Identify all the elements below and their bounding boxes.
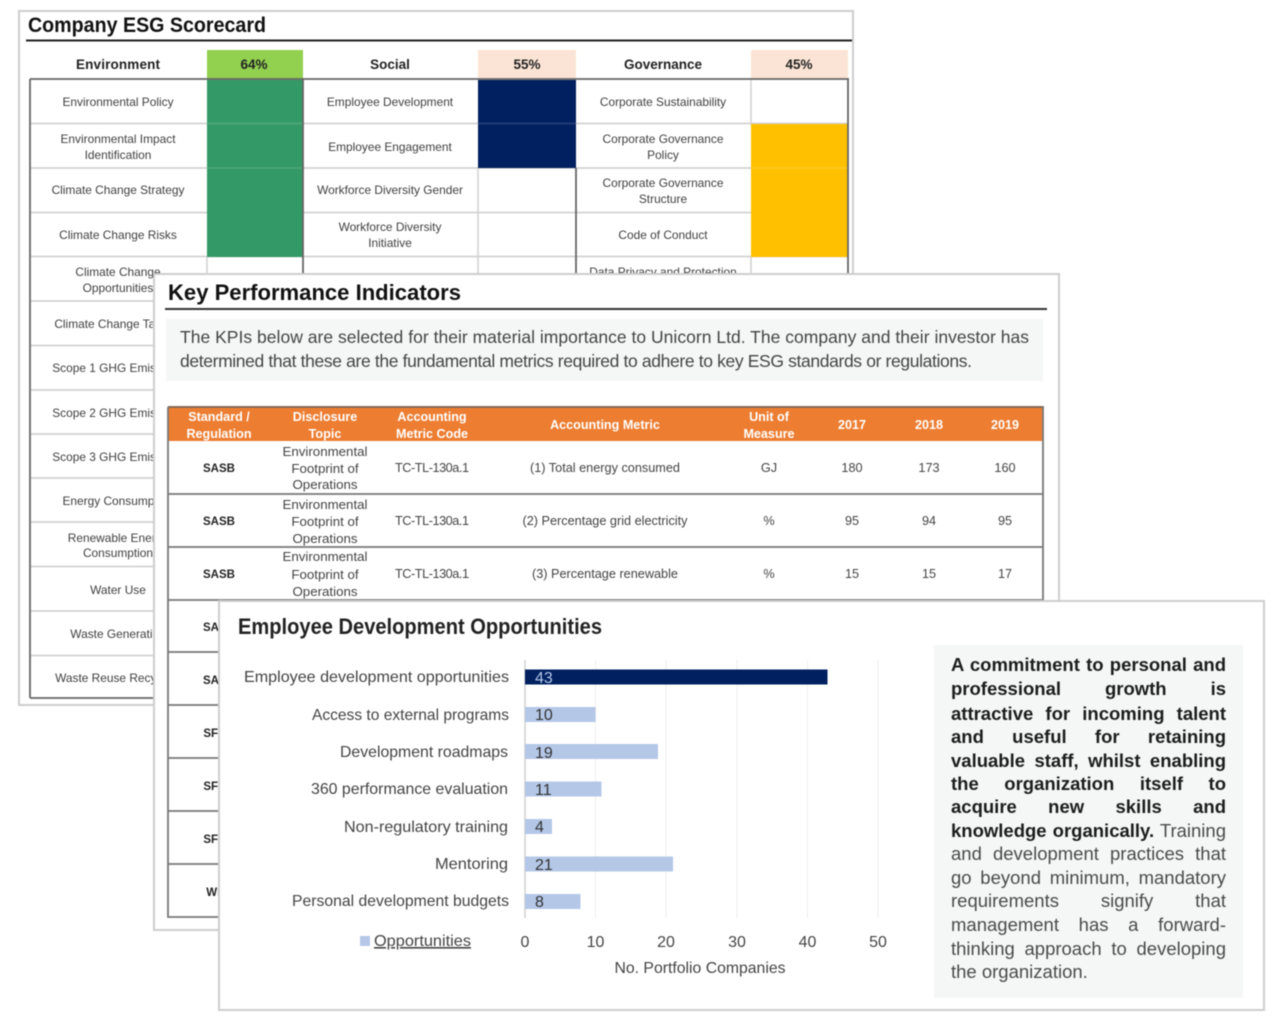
scorecard header row: 55% bbox=[513, 57, 541, 72]
KPI table header: 2018 bbox=[915, 418, 943, 432]
text block: commitment note: the organization itself to bbox=[951, 773, 1226, 794]
environment topics: Water Use bbox=[90, 583, 146, 597]
environment topics: Environmental Policy bbox=[62, 95, 174, 109]
KPI table row: grid electricity: Environmental bbox=[282, 497, 368, 512]
KPI table row: grid electricity: 95 bbox=[845, 514, 859, 528]
social topics: Employee Development bbox=[327, 95, 454, 109]
KPI table header: Topic bbox=[309, 427, 341, 441]
text block: commitment note: professional growth is bbox=[951, 678, 1226, 699]
text block: commitment note: thinking approach to developing bbox=[951, 938, 1226, 959]
KPI table row: total energy: Footprint of bbox=[291, 461, 359, 476]
intro text block: determined that these are the fundamental metrics required to adhere to key ESG standards or regulations. bbox=[180, 351, 972, 371]
panel: Company ESG Scorecard bbox=[18, 10, 854, 706]
KPI table row: grid electricity bbox=[203, 497, 1012, 546]
KPI table row: grid electricity: Footprint of bbox=[291, 514, 359, 529]
x axis ticks: 20 bbox=[657, 934, 675, 951]
text block: commitment note: and development practices that bbox=[951, 843, 1226, 864]
intro text block: The KPIs below are selected for their material importance to Unicorn Ltd. The company and their investor has bbox=[180, 327, 1029, 347]
KPI table row: total energy: 173 bbox=[918, 461, 940, 475]
environment topics: Environmental Impact bbox=[60, 132, 176, 146]
environment topics: Identification bbox=[85, 148, 151, 162]
KPI table standards column, lower rows: SFDR bbox=[203, 834, 235, 846]
scorecard header row: Governance bbox=[624, 57, 702, 72]
heading: Company ESG Scorecard: Company ESG Scorecard bbox=[28, 14, 266, 37]
KPI table row: renewable: Footprint of bbox=[291, 567, 359, 582]
bar value labels: 4 bbox=[535, 819, 544, 836]
KPI table header: Standard / bbox=[188, 410, 250, 424]
environment topics: Renewable Energy bbox=[68, 531, 168, 545]
social topics: Workforce Diversity Gender bbox=[317, 183, 463, 197]
category labels: Development roadmaps bbox=[340, 744, 508, 761]
heading: Employee Development Opportunities: Employee Development Opportunities bbox=[238, 614, 602, 639]
x axis ticks: 10 bbox=[587, 934, 604, 951]
social topics bbox=[317, 95, 463, 250]
bar value labels: 10 bbox=[535, 707, 553, 724]
environment topics: Scope 2 GHG Emissions bbox=[52, 406, 184, 420]
KPI table row: grid electricity: 94 bbox=[922, 514, 936, 528]
KPI table header: Accounting Metric bbox=[550, 418, 660, 432]
KPI table row: total energy: 160 bbox=[994, 461, 1016, 475]
category labels: Employee development opportunities bbox=[244, 669, 509, 686]
x axis title: No. Portfolio Companies bbox=[614, 960, 786, 977]
KPI table header: Accounting bbox=[397, 410, 467, 424]
category labels: Access to external programs bbox=[312, 707, 509, 724]
text block: commitment note: and useful for retaining bbox=[951, 726, 1226, 747]
category labels: Non-regulatory training bbox=[344, 819, 508, 836]
governance topics: Data Privacy and Protection bbox=[589, 265, 737, 279]
text block: commitment note: knowledge organically. Training bbox=[951, 820, 1226, 841]
KPI table header: 2017 bbox=[838, 418, 866, 432]
text block: commitment note bbox=[934, 645, 1243, 998]
governance topics: Corporate Sustainability bbox=[600, 95, 726, 109]
category labels bbox=[244, 669, 509, 910]
text block: commitment note: management has a forward- bbox=[951, 914, 1226, 935]
governance topics: Corporate Governance bbox=[603, 176, 724, 190]
environment topics: Climate Change Strategy bbox=[52, 183, 184, 197]
KPI table row: grid electricity: 95 bbox=[998, 514, 1012, 528]
category labels: Mentoring bbox=[435, 856, 508, 873]
KPI table standards column, lower rows: SFDR bbox=[203, 781, 235, 793]
scorecard score fills bbox=[207, 80, 848, 257]
chart legend: Opportunities bbox=[374, 933, 471, 950]
bar chart: opportunities bbox=[244, 669, 887, 977]
category labels: 360 performance evaluation bbox=[311, 781, 508, 798]
KPI table row: renewable bbox=[203, 549, 1012, 599]
governance topics: Policy bbox=[647, 148, 679, 162]
KPI table header: Metric Code bbox=[396, 427, 468, 441]
text block: commitment note: requirements signify that bbox=[951, 890, 1226, 911]
text block: commitment note: valuable staff, whilst enabling bbox=[951, 750, 1226, 771]
panel: Employee Development Opportunities bbox=[218, 600, 1265, 1011]
governance topics: Structure bbox=[639, 192, 688, 206]
KPI table row: grid electricity: Operations bbox=[292, 531, 358, 546]
scorecard header row bbox=[76, 50, 848, 80]
KPI table header bbox=[168, 406, 1044, 441]
KPI table row: total energy: (1) Total energy consumed bbox=[530, 461, 680, 475]
environment topics: Waste Generation bbox=[70, 627, 166, 641]
x axis ticks: 50 bbox=[869, 934, 887, 951]
governance topics: Corporate Governance bbox=[603, 132, 724, 146]
KPI table row: total energy: Environmental bbox=[282, 444, 368, 459]
KPI table row: total energy: GJ bbox=[761, 461, 777, 475]
scorecard header row: Environment bbox=[76, 57, 160, 72]
KPI table header: Disclosure bbox=[293, 410, 357, 424]
KPI table row: renewable: 15 bbox=[845, 567, 859, 581]
KPI table header: Regulation bbox=[186, 427, 252, 441]
text block: commitment note: go beyond minimum, mandatory bbox=[951, 867, 1226, 888]
KPI table row: grid electricity: TC-TL-130a.1 bbox=[395, 514, 469, 528]
environment topics: Waste Reuse Recycling bbox=[55, 671, 181, 685]
KPI table standards column, lower rows: SFDR bbox=[203, 728, 235, 740]
x axis ticks: 30 bbox=[728, 934, 746, 951]
bar value labels: 19 bbox=[535, 745, 553, 762]
KPI table row: grid electricity: % bbox=[763, 514, 775, 528]
KPI table header: Measure bbox=[743, 427, 795, 441]
bar value labels: 8 bbox=[535, 894, 544, 911]
KPI table row: renewable: Operations bbox=[292, 584, 358, 599]
KPI table row: total energy: 180 bbox=[841, 461, 863, 475]
governance topics bbox=[589, 95, 737, 279]
social topics: Initiative bbox=[368, 236, 412, 250]
KPI table header: Unit of bbox=[749, 410, 790, 424]
KPI table row: total energy bbox=[203, 444, 1016, 492]
text block: commitment note: the organization. bbox=[951, 961, 1088, 982]
KPI table row: total energy: Operations bbox=[292, 477, 358, 492]
environment topics: Opportunities bbox=[83, 281, 153, 295]
bar value labels: 43 bbox=[535, 670, 553, 687]
bars bbox=[525, 670, 828, 909]
panel: Key Performance Indicators bbox=[153, 273, 1060, 931]
scorecard header row: 45% bbox=[785, 57, 813, 72]
KPI table row: renewable: 17 bbox=[998, 567, 1012, 581]
KPI table row: renewable: Environmental bbox=[282, 549, 368, 564]
KPI table row: total energy: SASB bbox=[203, 463, 235, 475]
heading: Key Performance Indicators: Key Performance Indicators bbox=[168, 280, 461, 305]
category labels: Personal development budgets bbox=[292, 893, 509, 910]
KPI table row: renewable: (3) Percentage renewable bbox=[532, 567, 678, 581]
KPI table row: grid electricity: (2) Percentage grid electricity bbox=[522, 514, 688, 528]
text block: commitment note: attractive for incoming talent bbox=[951, 703, 1226, 724]
KPI table row: total energy: TC-TL-130a.1 bbox=[395, 461, 469, 475]
KPI table row: renewable: % bbox=[763, 567, 775, 581]
x axis ticks: 0 bbox=[521, 934, 530, 951]
governance topics: Code of Conduct bbox=[618, 228, 708, 242]
scorecard header row: 64% bbox=[240, 57, 268, 72]
text block: commitment note: acquire new skills and bbox=[951, 796, 1226, 817]
KPI table standards column, lower rows: SASB bbox=[203, 675, 235, 687]
environment topics: Scope 3 GHG Emissions bbox=[52, 450, 184, 464]
environment topics: Scope 1 GHG Emissions bbox=[52, 361, 184, 375]
KPI table header: 2019 bbox=[991, 418, 1019, 432]
environment topics: Climate Change bbox=[75, 265, 161, 279]
x axis ticks bbox=[521, 934, 887, 951]
KPI table row: renewable: SASB bbox=[203, 569, 235, 581]
environment topics: Climate Change Targets bbox=[54, 317, 182, 331]
KPI table standards column, lower rows bbox=[203, 622, 235, 899]
social topics: Employee Engagement bbox=[328, 140, 453, 154]
environment topics: Climate Change Risks bbox=[59, 228, 177, 242]
environment topics: Consumption bbox=[83, 546, 153, 560]
x axis ticks: 40 bbox=[799, 934, 816, 951]
KPI table standards column, lower rows: SASB bbox=[203, 622, 235, 634]
environment topics: Energy Consumption bbox=[62, 494, 174, 508]
intro text block bbox=[166, 319, 1043, 381]
bar value labels: 21 bbox=[535, 857, 553, 874]
bar value labels: 11 bbox=[535, 782, 552, 799]
social topics: Workforce Diversity bbox=[339, 220, 441, 234]
bar value labels bbox=[535, 670, 553, 911]
KPI table row: renewable: 15 bbox=[922, 567, 936, 581]
scorecard header row: Social bbox=[370, 57, 410, 72]
environment topics bbox=[52, 95, 184, 685]
text block: commitment note: A commitment to personal and bbox=[951, 654, 1226, 675]
KPI table row: renewable: TC-TL-130a.1 bbox=[395, 567, 469, 581]
KPI table row: grid electricity: SASB bbox=[203, 516, 235, 528]
KPI table standards column, lower rows: WEF bbox=[206, 887, 232, 899]
